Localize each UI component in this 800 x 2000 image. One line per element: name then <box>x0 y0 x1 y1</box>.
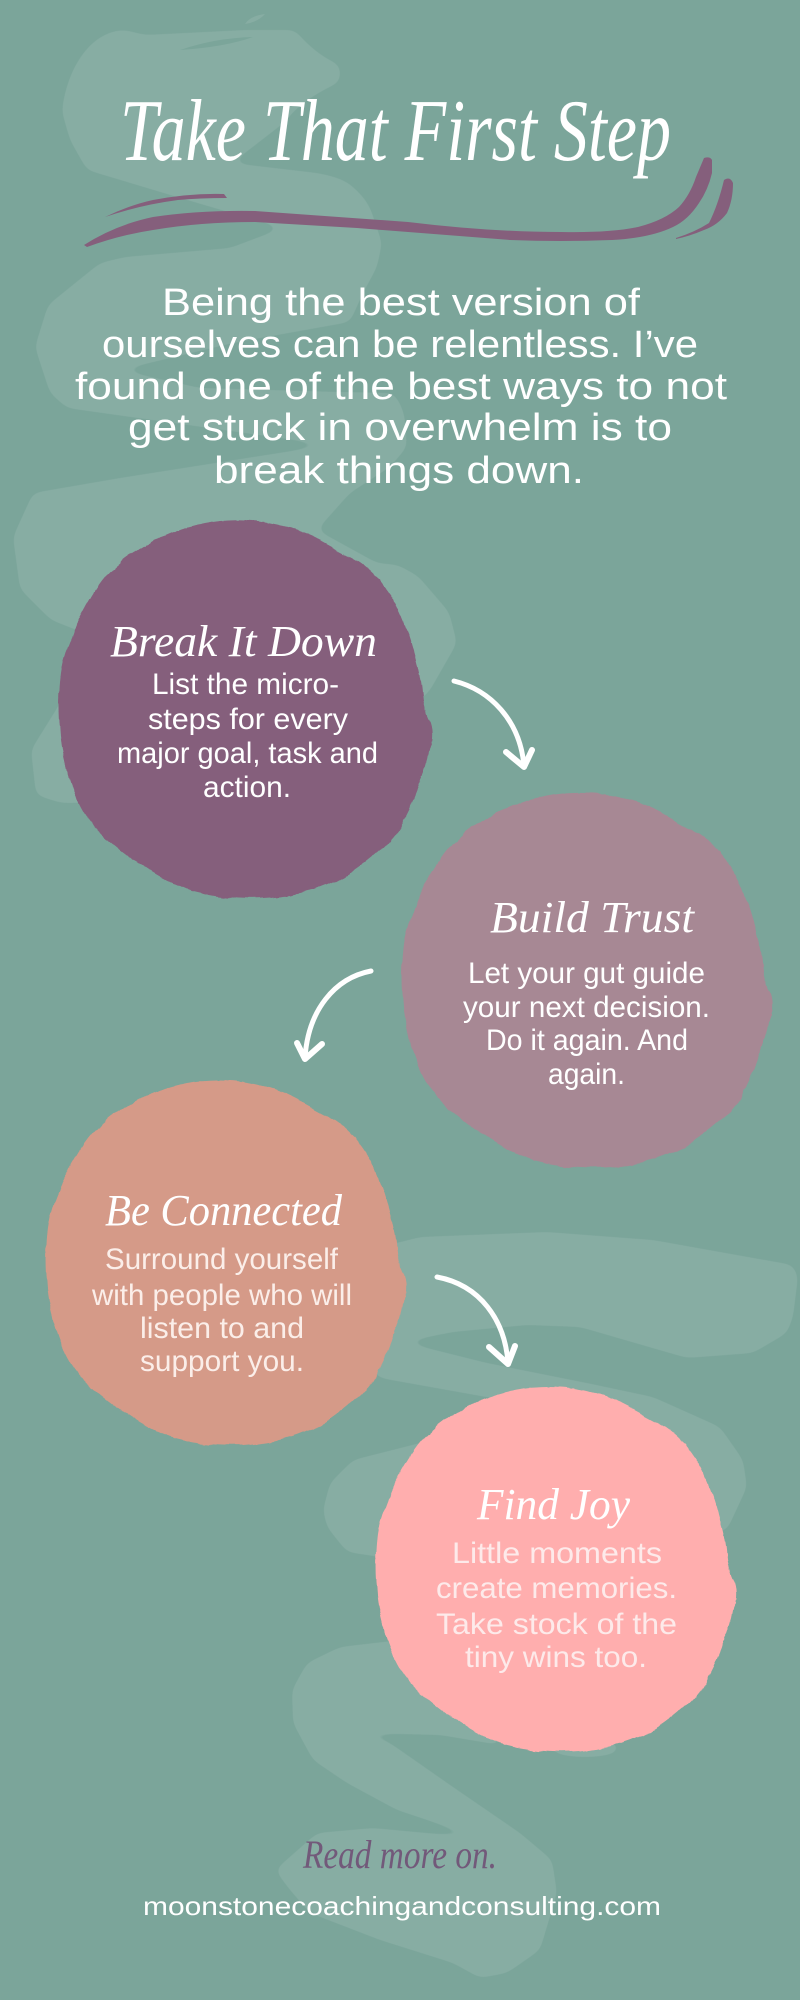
body text: steps for every <box>148 703 348 736</box>
arrow: step 1 to step 2 <box>454 681 532 767</box>
body text: action. <box>203 771 291 804</box>
panel: Break It Down <box>59 520 432 899</box>
body text: major goal, task and <box>117 737 378 770</box>
panel: Be Connected <box>46 1080 406 1446</box>
blob: pink <box>376 1386 736 1752</box>
intro paragraph: get stuck in overwhelm is to <box>128 407 672 449</box>
title underline swoosh <box>84 157 733 247</box>
body text <box>436 1537 677 1674</box>
body text: again. <box>548 1058 625 1091</box>
intro paragraph: ourselves can be relentless. I’ve <box>102 324 698 366</box>
body text: Surround yourself <box>105 1243 339 1276</box>
body text: your next decision. <box>463 991 710 1024</box>
body text: with people who will <box>91 1279 352 1312</box>
footer: website url: moonstonecoachingandconsulting.com <box>143 1891 661 1921</box>
body text: tiny wins too. <box>465 1641 647 1674</box>
blob: salmon <box>46 1080 406 1446</box>
body text: Let your gut guide <box>468 957 705 990</box>
body text <box>91 1243 352 1378</box>
body text: Little moments <box>452 1537 662 1570</box>
arrow: step 2 to step 3 <box>297 971 371 1059</box>
body text: support you. <box>140 1345 304 1378</box>
heading: Be Connected <box>105 1186 343 1235</box>
heading: Build Trust <box>490 893 696 942</box>
panel: Build Trust <box>402 792 772 1168</box>
blob: purple <box>59 520 432 899</box>
body text: List the micro- <box>152 668 339 701</box>
intro paragraph: found one of the best ways to not <box>75 366 728 408</box>
body text <box>463 957 710 1091</box>
intro paragraph: Being the best version of <box>162 282 640 324</box>
body text: create memories. <box>436 1572 677 1605</box>
intro paragraph <box>75 282 728 492</box>
heading: Find Joy <box>476 1480 630 1529</box>
swirl flecks <box>245 14 265 24</box>
heading: Break It Down <box>110 617 377 666</box>
body text: Do it again. And <box>486 1024 688 1057</box>
footer: read more: Read more on. <box>302 1832 497 1877</box>
body text: Take stock of the <box>436 1608 677 1641</box>
intro paragraph: break things down. <box>214 450 584 492</box>
blob: mauve <box>402 792 772 1168</box>
body text <box>117 668 378 804</box>
panel: Find Joy <box>376 1386 736 1752</box>
arrow: step 3 to step 4 <box>437 1277 515 1364</box>
body text: listen to and <box>140 1312 304 1345</box>
